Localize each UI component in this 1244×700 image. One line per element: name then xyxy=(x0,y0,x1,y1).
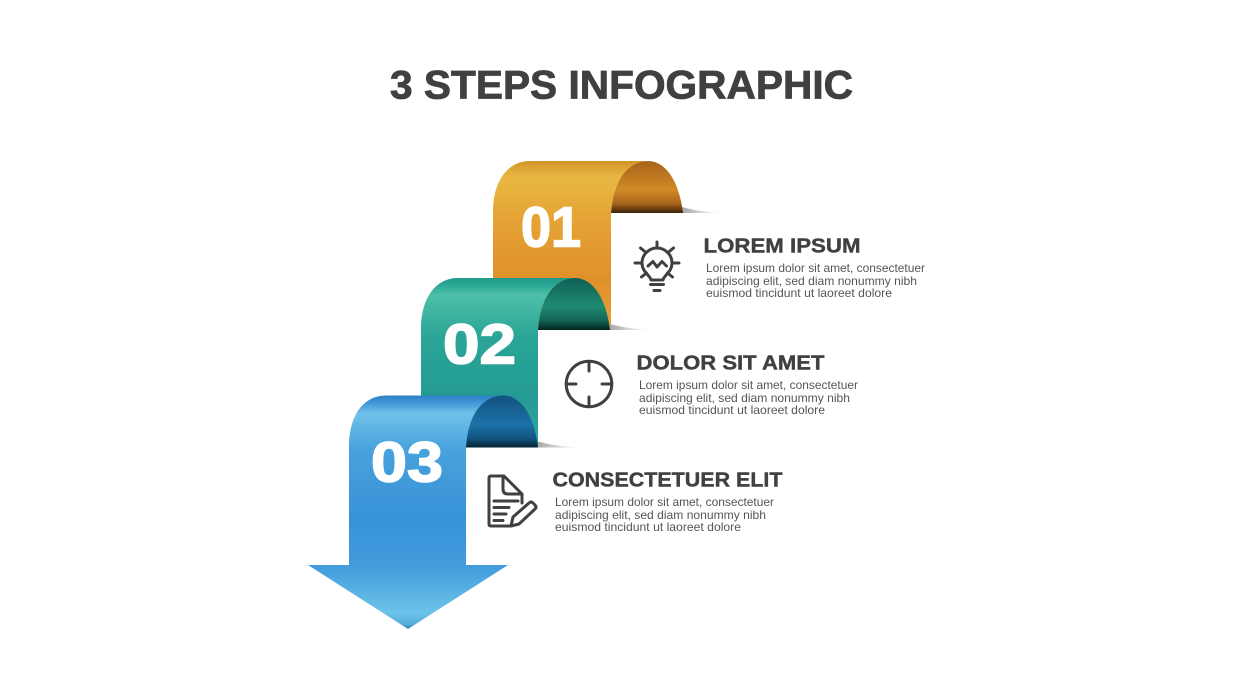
body 3: adipiscing elit, sed diam nonummy nibh xyxy=(555,508,766,522)
heading 2: DOLOR SIT AMET xyxy=(636,352,825,374)
body 2: euismod tincidunt ut laoreet dolore xyxy=(639,403,825,417)
front band 3 xyxy=(349,396,503,566)
inner fold 1 xyxy=(611,161,683,213)
body 2: Lorem ipsum dolor sit amet, consectetuer xyxy=(639,378,858,392)
shadow 2 xyxy=(610,324,652,330)
body 1: Lorem ipsum dolor sit amet, consectetuer xyxy=(706,261,925,275)
text block 2 xyxy=(636,352,858,417)
title: 3 STEPS INFOGRAPHIC xyxy=(390,64,853,108)
text block 1 xyxy=(704,234,925,300)
icon: light bulb xyxy=(635,242,679,290)
icon: document with pencil xyxy=(489,476,536,526)
heading 3: CONSECTETUER ELIT xyxy=(552,468,783,492)
shadow 1 xyxy=(682,207,724,213)
number 03: 03 xyxy=(371,430,443,494)
body 3 xyxy=(555,495,774,534)
front band 2 xyxy=(421,278,575,448)
shadow 3 xyxy=(538,442,582,448)
body 3: Lorem ipsum dolor sit amet, consectetuer xyxy=(555,495,774,509)
number 02: 02 xyxy=(443,312,516,376)
arrow head xyxy=(308,565,508,629)
text block 3 xyxy=(552,468,783,534)
body 1: euismod tincidunt ut laoreet dolore xyxy=(706,286,892,300)
body 2 xyxy=(639,378,858,417)
front band 1 xyxy=(493,161,648,330)
body 3: euismod tincidunt ut laoreet dolore xyxy=(555,520,741,534)
body 1 xyxy=(706,261,925,300)
body 2: adipiscing elit, sed diam nonummy nibh xyxy=(639,391,850,405)
inner fold 3 xyxy=(466,396,538,448)
ribbon step 1 xyxy=(493,161,724,330)
ribbon step 3 with arrow xyxy=(308,396,582,629)
heading 1: LOREM IPSUM xyxy=(704,234,860,258)
ribbon step 2 xyxy=(421,278,652,448)
inner fold 2 xyxy=(538,278,610,330)
body 1: adipiscing elit, sed diam nonummy nibh xyxy=(706,274,917,288)
number 01: 01 xyxy=(521,196,581,260)
icon: target xyxy=(566,361,612,407)
